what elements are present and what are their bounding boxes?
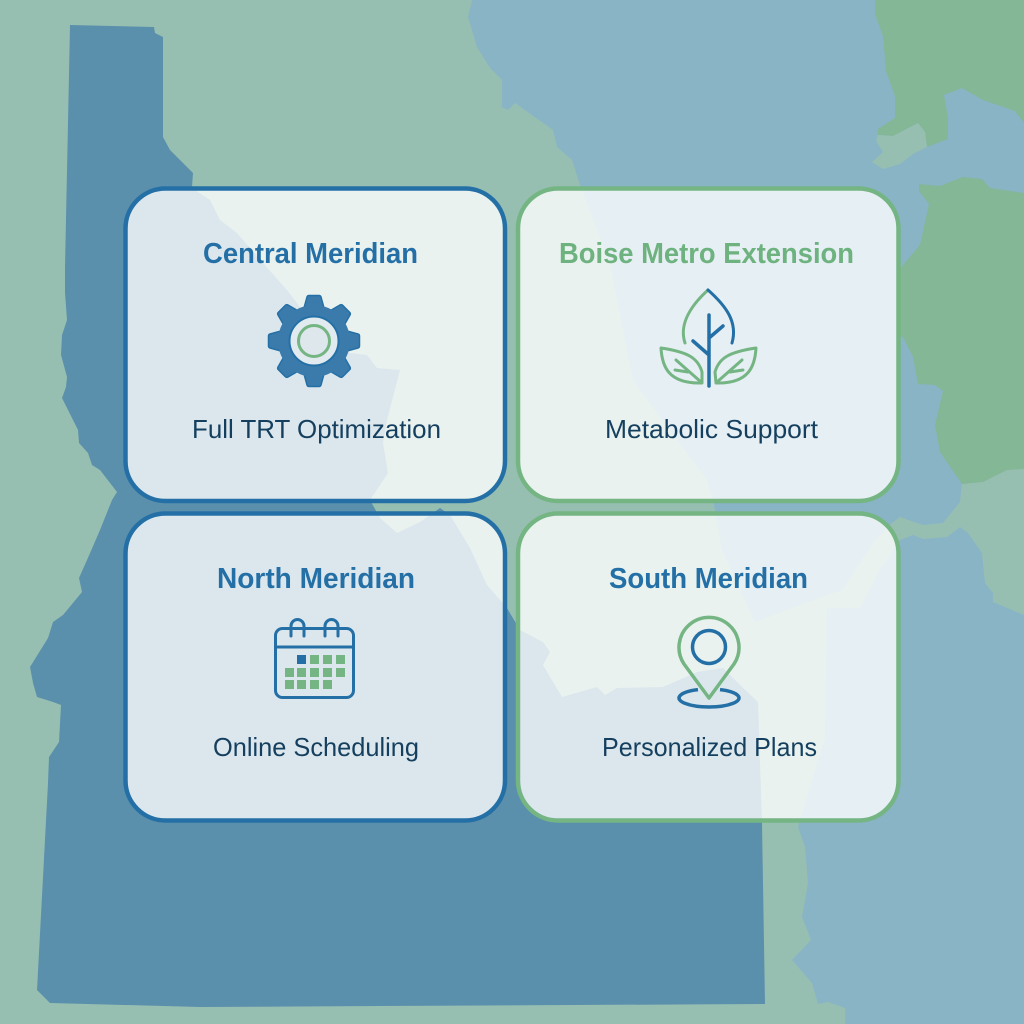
icon: gear xyxy=(268,296,360,386)
heading: South Meridian: South Meridian xyxy=(609,563,808,595)
text: Metabolic Support: Metabolic Support xyxy=(605,414,819,444)
icon: location pin xyxy=(679,617,739,707)
heading: Central Meridian: Central Meridian xyxy=(203,238,418,270)
panel: Boise Metro Extension xyxy=(518,188,898,501)
map: middle right green land xyxy=(898,177,1024,484)
heading: Boise Metro Extension: Boise Metro Extension xyxy=(559,238,854,270)
map: lower water xyxy=(792,527,1024,1024)
panel: Central Meridian xyxy=(126,188,505,501)
text: Full TRT Optimization: Full TRT Optimization xyxy=(192,414,441,444)
text: Online Scheduling: Online Scheduling xyxy=(213,732,419,762)
map: highlighted state land xyxy=(30,25,765,1007)
heading: North Meridian: North Meridian xyxy=(217,563,415,595)
map: upper right green land xyxy=(875,0,1024,147)
panel: South Meridian xyxy=(518,514,898,820)
icon: leaves xyxy=(661,290,756,386)
text: Personalized Plans: Personalized Plans xyxy=(602,732,817,762)
panel: North Meridian xyxy=(126,514,505,820)
map: small sage island xyxy=(872,123,927,169)
icon: calendar xyxy=(276,620,354,698)
map: upper water xyxy=(468,0,1024,622)
